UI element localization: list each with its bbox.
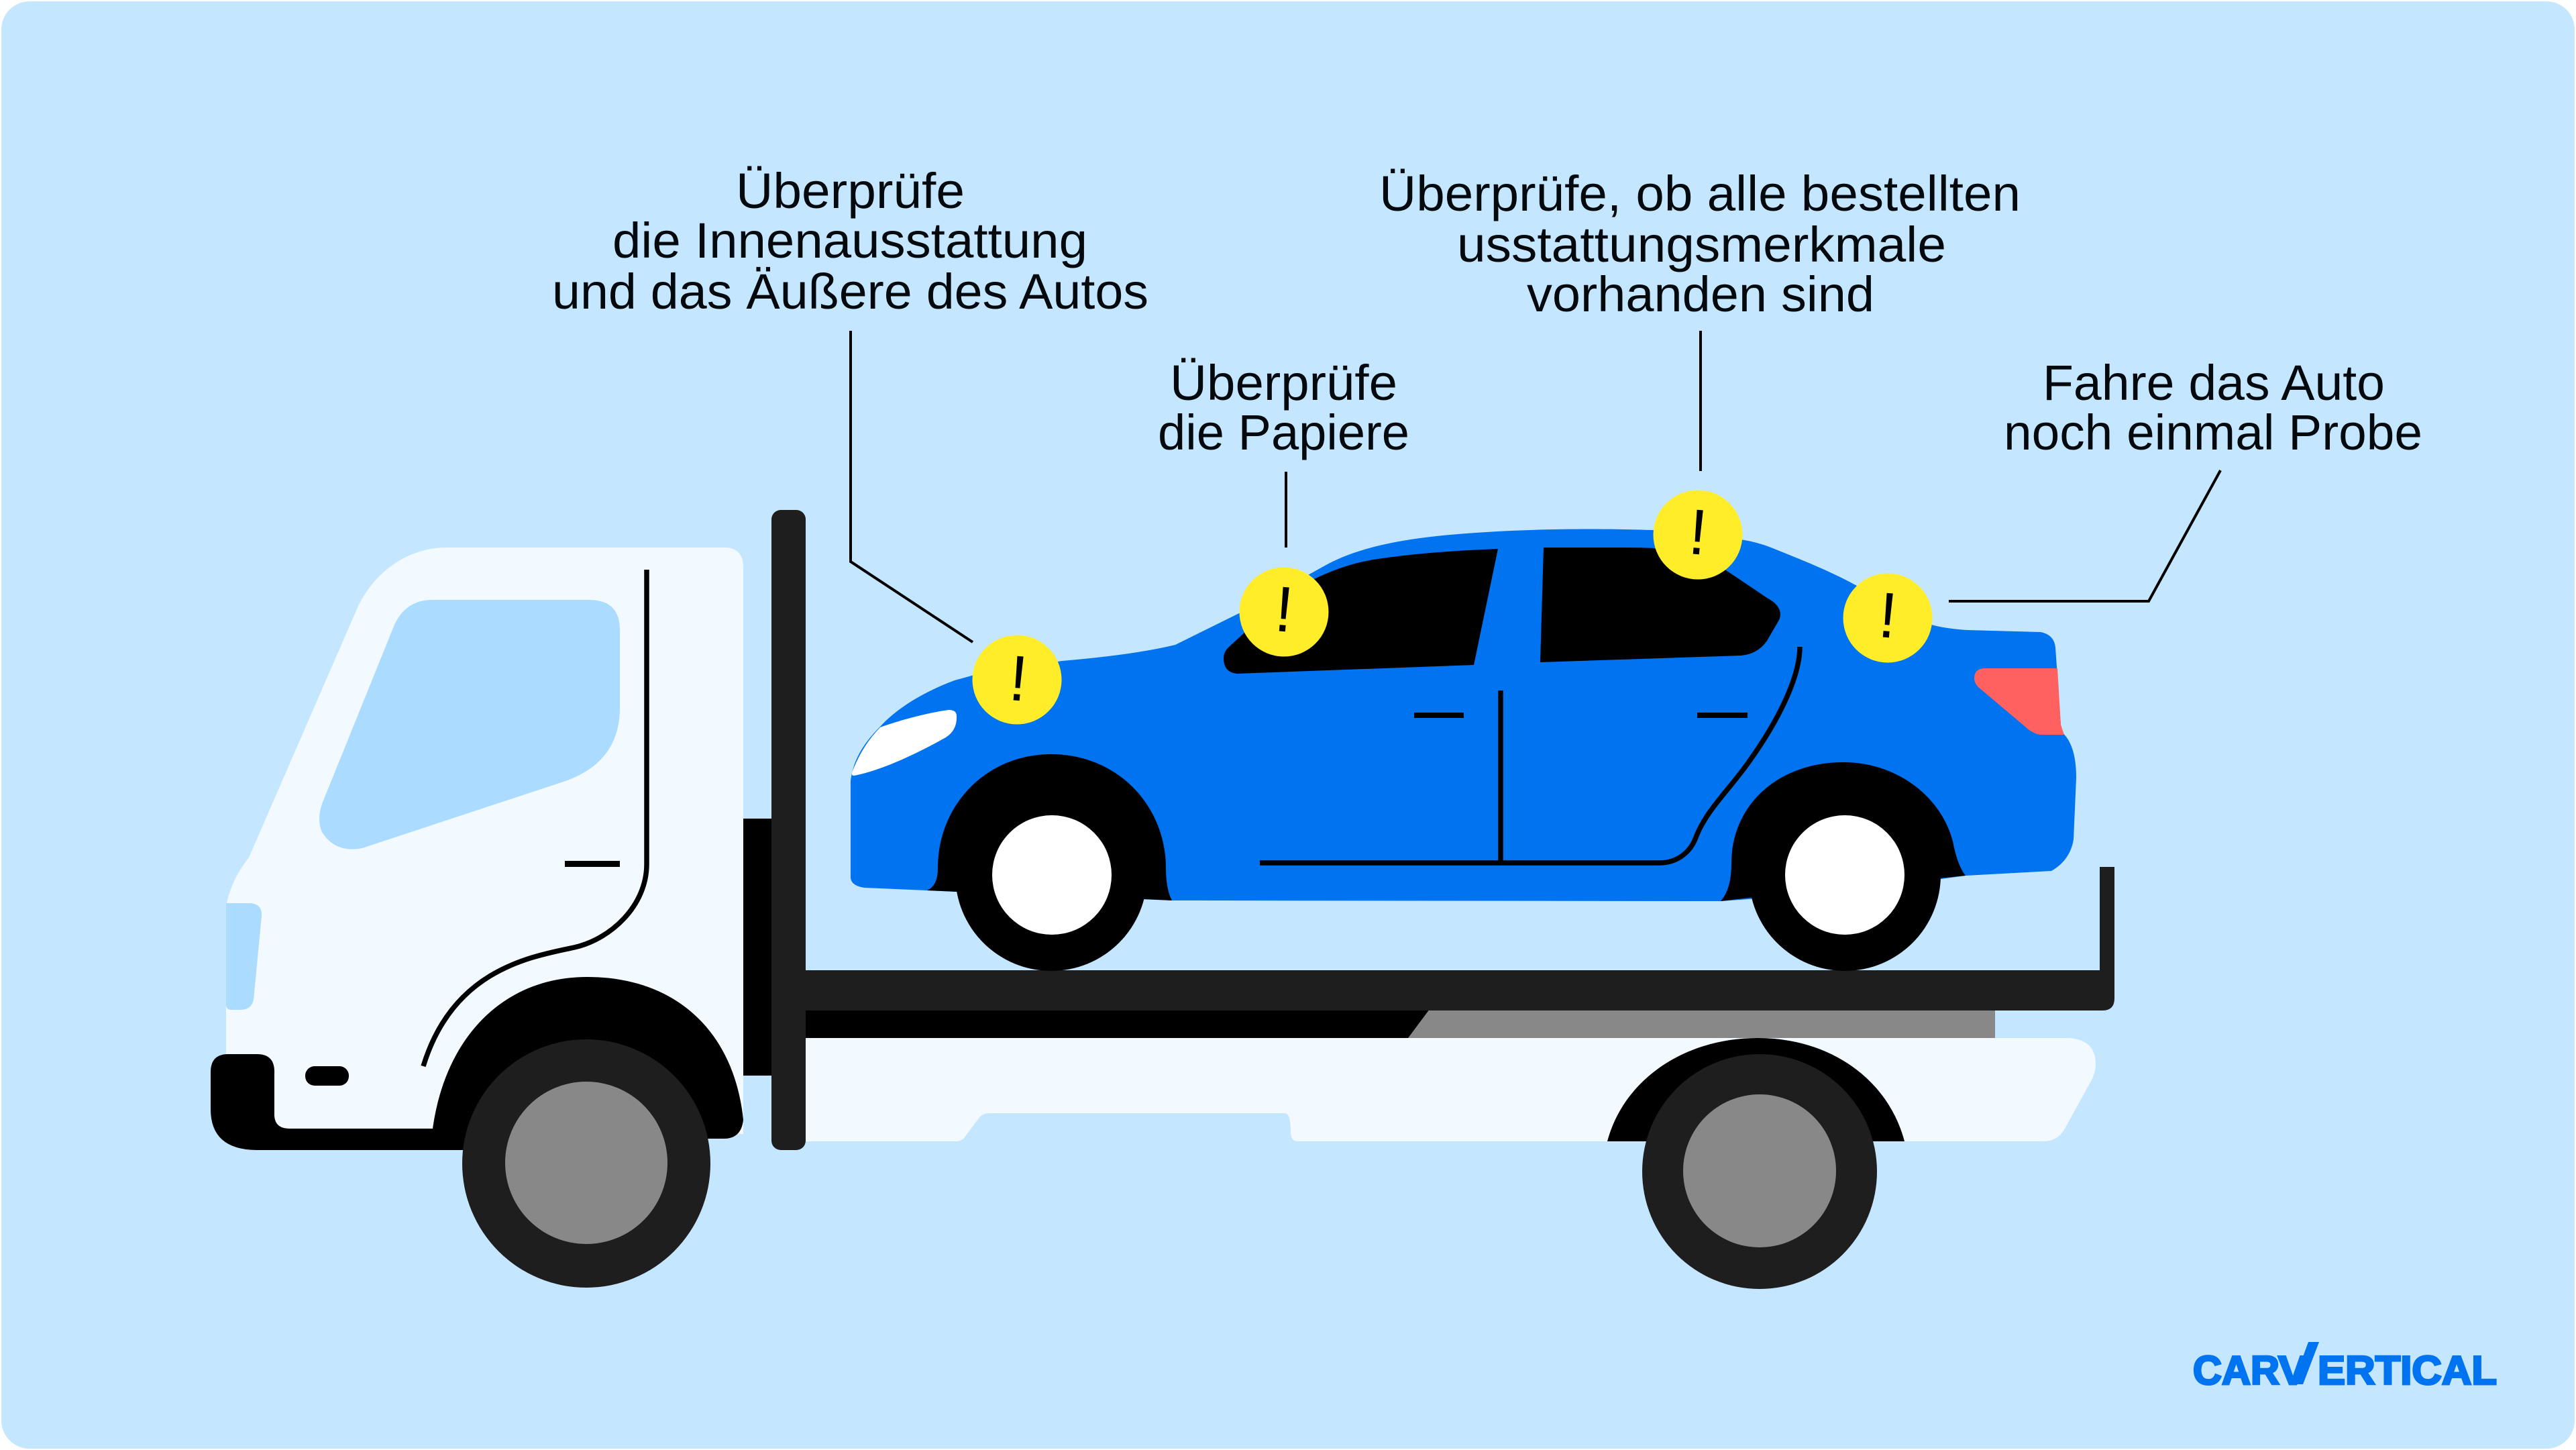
text: interior and exterior: die Innenausstattung bbox=[612, 213, 1087, 268]
logo: carVertical: ERTICAL bbox=[2318, 1348, 2497, 1393]
door line bbox=[423, 570, 647, 1066]
badge: papers bbox=[1240, 568, 1328, 656]
rear window bbox=[1540, 548, 1780, 662]
text: equipment bbox=[1379, 166, 2021, 322]
cab window bbox=[319, 600, 620, 849]
front wheel arch bbox=[433, 977, 743, 1150]
text: equipment: usstattungsmerkmale bbox=[1457, 217, 1946, 272]
door handles bbox=[1414, 713, 1748, 718]
front wheel bbox=[462, 1039, 710, 1288]
logo: carVertical: CAR bbox=[2193, 1348, 2279, 1393]
text: test drive bbox=[2004, 355, 2422, 460]
tail light bbox=[1974, 668, 2064, 735]
logo: carVertical bbox=[2193, 1342, 2497, 1393]
leader line: test drive bbox=[1949, 470, 2220, 601]
text: equipment: vorhanden sind bbox=[1527, 266, 1874, 322]
badge: hood bbox=[973, 635, 1061, 725]
cab rear connector bbox=[743, 819, 773, 1076]
cab headlight bbox=[226, 903, 262, 1010]
text: test drive: noch einmal Probe bbox=[2004, 405, 2422, 460]
text: papers bbox=[1158, 355, 1409, 460]
leader line: interior and exterior bbox=[851, 331, 973, 642]
badge: papers: ! bbox=[1272, 573, 1296, 646]
chassis underframe bbox=[798, 1006, 1995, 1038]
fog light bbox=[305, 1066, 349, 1086]
text: test drive: Fahre das Auto bbox=[2043, 355, 2385, 411]
car headlight bbox=[852, 710, 957, 776]
badge: equipment: ! bbox=[1686, 496, 1710, 569]
front window bbox=[1224, 549, 1498, 674]
door handle bbox=[565, 861, 620, 867]
vertical pillar bbox=[771, 510, 806, 1150]
flatbed platform bbox=[798, 867, 2114, 1011]
front wheel bbox=[927, 754, 1172, 971]
text: interior and exterior bbox=[552, 163, 1148, 319]
text: interior and exterior: und das Äußere des Autos bbox=[552, 264, 1148, 319]
logo: carVertical: V bbox=[2278, 1348, 2308, 1393]
car body bbox=[851, 529, 2076, 901]
rear wheel bbox=[1607, 1038, 1904, 1289]
text: papers: die Papiere bbox=[1158, 405, 1409, 460]
badge: test drive: ! bbox=[1876, 579, 1900, 652]
cab body bbox=[226, 548, 743, 1134]
text: equipment: Überprüfe, ob alle bestellten bbox=[1379, 166, 2021, 221]
blue car bbox=[851, 529, 2076, 971]
badge: hood: ! bbox=[1006, 642, 1030, 715]
leader line: papers bbox=[1285, 472, 1287, 548]
rear wheel bbox=[1721, 762, 1966, 971]
badge: test drive bbox=[1843, 573, 1932, 663]
tow truck bbox=[211, 510, 2114, 1289]
truck chassis bbox=[798, 1038, 2096, 1141]
door lines bbox=[1260, 647, 1800, 863]
badge: equipment bbox=[1653, 490, 1743, 580]
leader line: equipment bbox=[1699, 331, 1702, 471]
front bumper bbox=[211, 1054, 470, 1150]
text: interior and exterior: Überprüfe bbox=[736, 163, 965, 219]
text: papers: Überprüfe bbox=[1170, 355, 1397, 411]
